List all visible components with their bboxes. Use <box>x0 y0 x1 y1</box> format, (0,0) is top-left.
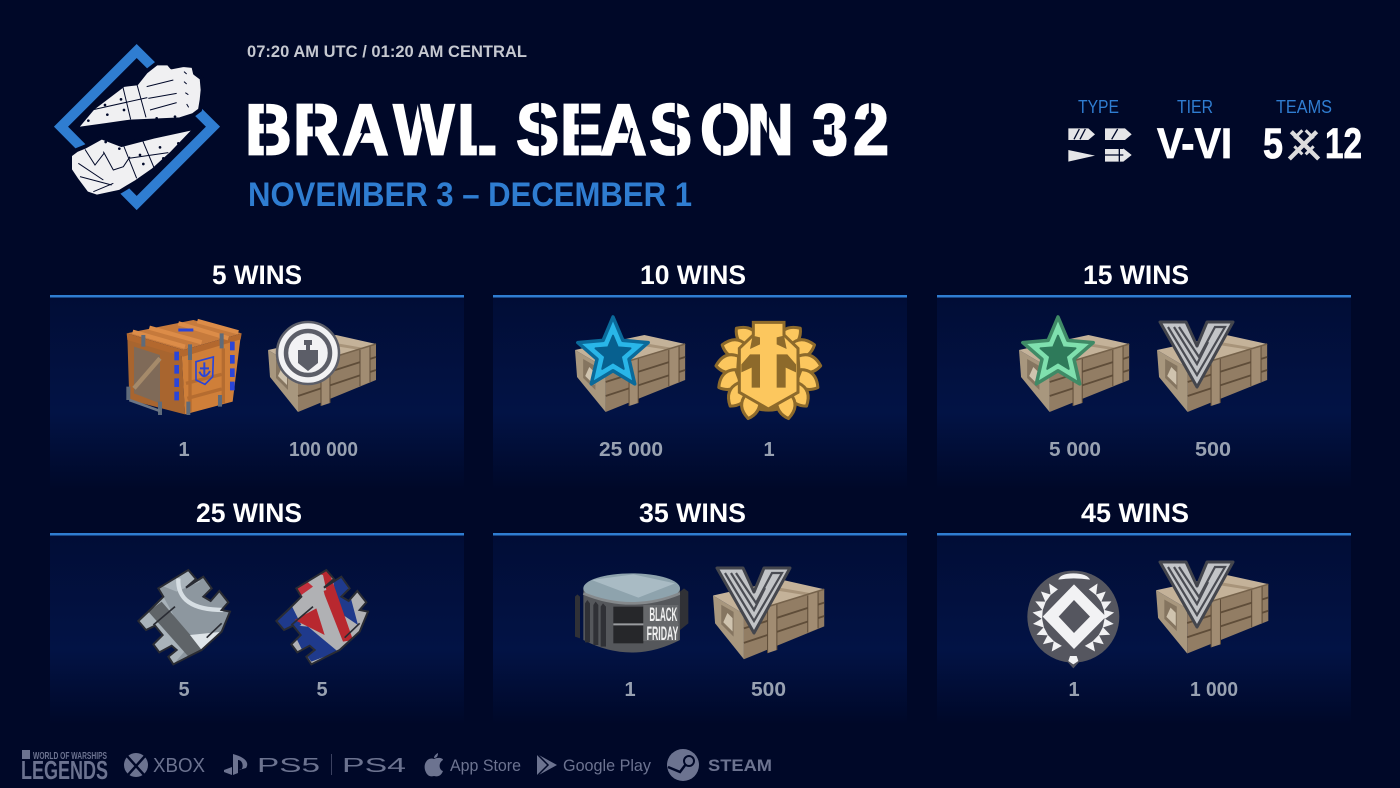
heading: 10 wins: 10 WINS <box>640 260 746 290</box>
value: 5: 5 <box>178 679 190 701</box>
logo: App Store <box>425 753 521 776</box>
logo: World of Warships Legends <box>21 750 108 785</box>
logo: Xbox: XBOX <box>153 755 205 777</box>
logo: crossed gauntlets in blue diamond <box>61 51 213 203</box>
icon: V crate <box>1156 562 1268 654</box>
date range: NOVEMBER 3 – DECEMBER 1 <box>248 176 692 214</box>
logo: Steam: STEAM <box>708 756 772 775</box>
info: teams: 12 <box>1325 120 1362 168</box>
icon: credits crate <box>268 322 376 412</box>
heading: 25 wins: 25 WINS <box>196 498 302 528</box>
value: 1: 1 <box>763 439 775 461</box>
icon: Black Friday ammo drum: BLACK <box>649 605 677 626</box>
panel: 5 wins <box>50 260 464 490</box>
heading: 15 wins: 15 WINS <box>1083 260 1189 290</box>
info: type <box>1068 97 1132 162</box>
logo: World of Warships Legends: LEGENDS <box>21 755 108 785</box>
value: 25 000: 25 000 <box>599 439 663 461</box>
logo: PlayStation 5 and 4: PS4 <box>342 755 406 777</box>
icon: crossed swords <box>1289 130 1319 159</box>
logo: Xbox <box>124 753 205 777</box>
heading: 5 wins: 5 WINS <box>212 260 302 290</box>
value: 1: 1 <box>178 439 190 461</box>
value: 500: 500 <box>1195 439 1231 461</box>
icon: orange anchor crate <box>127 320 242 415</box>
icon: gold wreath emblem <box>715 321 822 421</box>
info: teams <box>1263 97 1362 168</box>
info: teams: TEAMS <box>1276 97 1332 117</box>
icon: union flag patch <box>275 569 370 666</box>
time line: 07:20 AM UTC / 01:20 AM CENTRAL <box>247 43 527 61</box>
title: BRAWL SEASON 32 <box>245 89 889 170</box>
icon: ship type bullets <box>1068 128 1132 162</box>
panel: 10 wins <box>493 260 907 490</box>
panel: 45 wins <box>937 498 1351 725</box>
icon: green star crate <box>1019 317 1129 412</box>
icon: grey patch <box>137 569 232 666</box>
icon: V crate <box>713 568 824 659</box>
logo: Google Play <box>537 754 651 776</box>
panel: 15 wins <box>937 260 1351 490</box>
icon: blue star crate <box>575 317 685 412</box>
value: 5 000: 5 000 <box>1049 439 1101 461</box>
footer: platform logos <box>21 749 772 785</box>
value: 1 000: 1 000 <box>1190 679 1238 701</box>
value: 500: 500 <box>751 679 786 701</box>
panel: 35 wins <box>493 498 907 725</box>
info: tier: V-VI <box>1157 120 1232 168</box>
info: type: TYPE <box>1078 97 1119 117</box>
info: teams: 5 <box>1263 120 1283 168</box>
logo: World of Warships Legends: WORLD OF WARSHIPS <box>33 751 107 762</box>
info: tier <box>1157 97 1232 168</box>
value: 5: 5 <box>316 679 328 701</box>
logo: PlayStation 5 and 4 <box>224 754 406 777</box>
value: 1: 1 <box>1068 679 1080 701</box>
icon: V crate <box>1157 322 1267 412</box>
logo: Steam <box>667 749 772 781</box>
value: 100 000: 100 000 <box>289 439 358 461</box>
panel: 25 wins <box>50 503 464 704</box>
heading: 35 wins: 35 WINS <box>639 498 746 528</box>
value: 1: 1 <box>624 679 636 701</box>
logo: App Store: App Store <box>450 756 521 775</box>
heading: 45 wins: 45 WINS <box>1081 498 1189 528</box>
icon: Black Friday ammo drum: FRIDAY <box>647 624 678 645</box>
info: tier: TIER <box>1177 97 1213 117</box>
icon: diamond wreath badge <box>1027 571 1119 668</box>
icon: Black Friday ammo drum <box>575 573 688 652</box>
logo: Google Play: Google Play <box>563 756 651 775</box>
logo: PlayStation 5 and 4: PS5 <box>257 755 320 777</box>
